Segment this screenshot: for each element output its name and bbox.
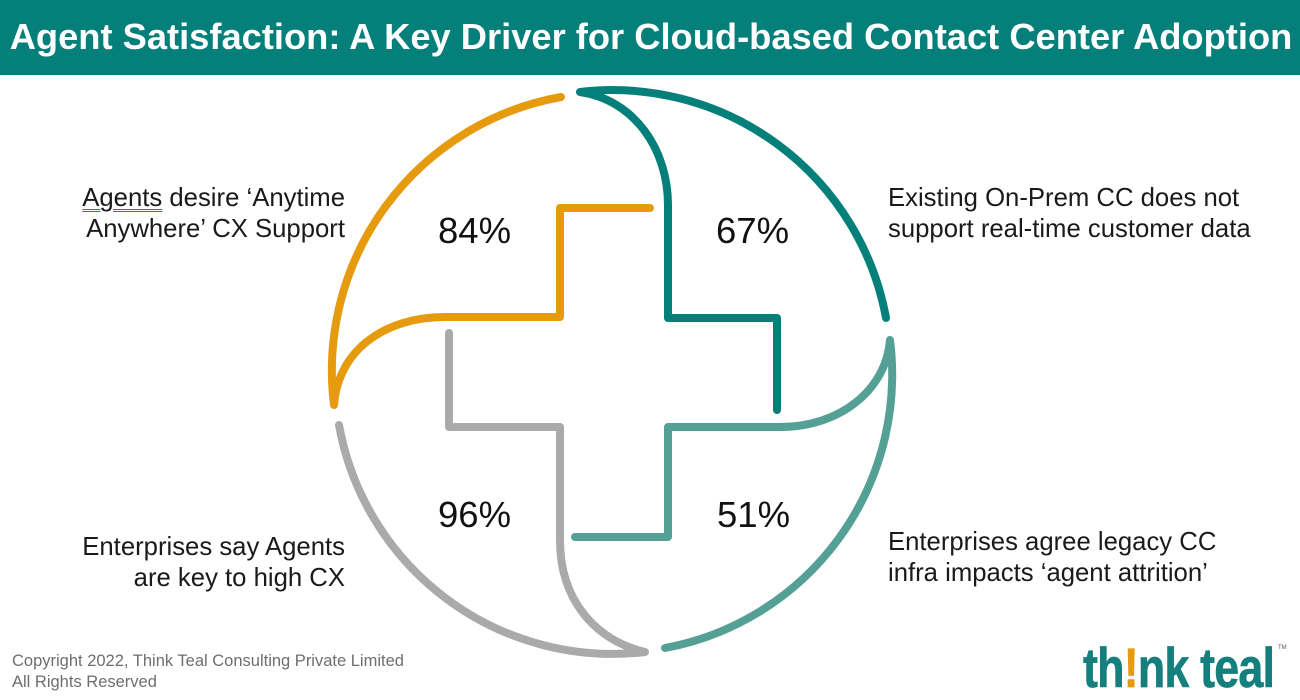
text: agents key to high CX: are key to high CX [134,564,345,592]
stat: 96%: 96% [438,494,511,535]
stat: 84%: 84% [438,210,511,251]
segment: light teal [575,340,892,648]
text: on-prem does not support real-time data: support real-time customer data [888,215,1251,243]
segment: teal [580,90,886,410]
copyright notice: Copyright 2022, Think Teal Consulting Private Limited [12,652,404,670]
segment: orange [332,97,650,405]
text: legacy infra impacts attrition: infra impacts ‘agent attrition’ [888,559,1208,587]
segment: gray [339,333,645,654]
copyright notice [12,652,404,690]
text: legacy infra impacts attrition [888,528,1216,587]
text: on-prem does not support real-time data [888,184,1251,243]
text: agents desire anytime anywhere: Anywhere’ CX Support [86,215,345,243]
stat: 67%: 67% [716,210,789,251]
copyright notice: All Rights Reserved [12,672,157,690]
text: agents key to high CX: Enterprises say Agents [82,533,345,561]
text: legacy infra impacts attrition: Enterprises agree legacy CC [888,528,1216,556]
title banner: Agent Satisfaction: A Key Driver for Cloud-based Contact Center Adoption [10,16,1292,57]
stat: 51%: 51% [717,494,790,535]
text: on-prem does not support real-time data: Existing On-Prem CC does not [888,184,1239,212]
text: agents desire anytime anywhere: Agents desire ‘Anytime [82,184,345,212]
text: agents key to high CX [82,533,345,592]
logo: think teal: TM [1278,645,1287,651]
title banner [0,0,1300,75]
text: agents desire anytime anywhere [82,184,345,243]
